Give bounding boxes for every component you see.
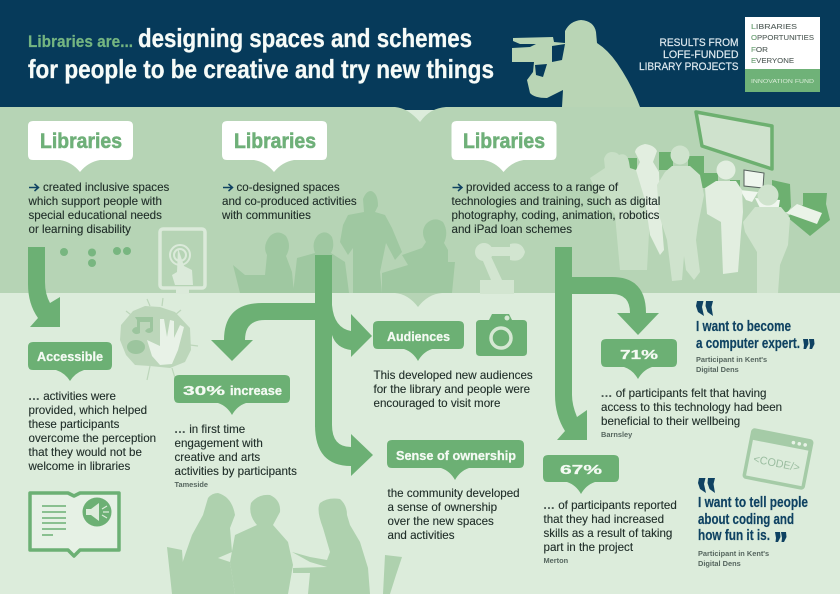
- text: results from: LOFE-FUNDED: [663, 49, 739, 61]
- label: Accessible: Accessible: [37, 349, 103, 364]
- background: header navy: [0, 0, 840, 110]
- text: 67% of participants: that they had increased: [544, 513, 664, 526]
- text: co-designed spaces: with communities: [221, 209, 311, 222]
- text: 71% of participants: beneficial to their wellbeing: [601, 415, 740, 428]
- label: 30% increase: increase: [230, 383, 282, 398]
- text: developed new audiences: encouraged to visit more: [374, 397, 500, 410]
- text: 71% of participants: ... of participants felt that having: [601, 387, 766, 400]
- text: community developed: the community developed: [388, 487, 520, 500]
- logo: Libraries Opportunities for Everyone: INNOVATION FUND: [751, 79, 814, 85]
- panel: Libraries heading 2: Libraries: [234, 130, 316, 153]
- panel: Libraries heading 1: [28, 121, 133, 172]
- text: first time engagement: creative and arts: [174, 451, 260, 464]
- label: 71%: 71%: [620, 347, 659, 362]
- label: Audiences: Audiences: [387, 329, 450, 344]
- label: Audiences: [373, 321, 464, 361]
- icon: three people talking: [167, 493, 402, 594]
- logo: Libraries Opportunities for Everyone: [745, 17, 820, 92]
- text: provided access: [452, 181, 660, 236]
- text: created inclusive spaces: or learning disability: [28, 223, 131, 236]
- text: results from: RESULTS FROM: [660, 37, 738, 49]
- logo: Libraries Opportunities for Everyone: LIBRARIES: [751, 22, 797, 31]
- text: created inclusive spaces: created inclusive spaces: [43, 181, 170, 194]
- logo: Libraries Opportunities for Everyone: FOR: [751, 45, 769, 54]
- text: activities were provided: provided, which helped: [28, 404, 147, 417]
- text: created inclusive spaces: special educational needs: [28, 209, 162, 222]
- panel: Libraries heading 1: Libraries: [40, 130, 122, 153]
- label: 67%: 67%: [560, 462, 603, 477]
- text: co-designed spaces: [221, 181, 357, 222]
- quote: computer expert: Digital Dens: [696, 365, 739, 374]
- quote: computer expert: I want to become: [696, 318, 791, 335]
- icon: camera: [476, 314, 527, 356]
- text: community developed: over the new spaces: [388, 515, 494, 528]
- text: activities were provided: ... activities were: [28, 390, 116, 403]
- panel: Libraries heading 3: Libraries: [463, 130, 545, 153]
- arrow: to Accessible: [28, 247, 60, 327]
- icon: code window: [744, 430, 812, 488]
- logo: Libraries Opportunities for Everyone: OPPORTUNITIES: [751, 33, 814, 42]
- text: first time engagement: ... in first time: [174, 423, 245, 436]
- quote: computer expert: a computer expert.: [696, 335, 800, 352]
- text: provided access: and iPad loan schemes: [452, 223, 572, 236]
- logo: Libraries Opportunities for Everyone: EVERYONE: [751, 56, 794, 65]
- text: community developed: [388, 487, 520, 542]
- icon: painted hand splat: [120, 298, 198, 380]
- text: activities were provided: welcome in libraries: [28, 460, 131, 473]
- text: 67% of participants: Merton: [544, 556, 569, 565]
- icon: code window: <CODE/>: [752, 453, 801, 474]
- text: developed new audiences: This developed new audiences: [374, 369, 533, 382]
- label: Sense of ownership: Sense of ownership: [396, 448, 516, 463]
- text: provided access: technologies and training, such as digital: [452, 195, 660, 208]
- text: co-designed spaces: co-designed spaces: [236, 181, 340, 194]
- quote: coding: Participant in Kent's: [698, 549, 769, 558]
- label: 71%: [601, 339, 677, 379]
- text: 71% of participants: [601, 387, 782, 439]
- icon: braille dots: [60, 247, 131, 267]
- text: developed new audiences: for the library and people were: [374, 383, 530, 396]
- text: first time engagement: activities by participants: [174, 465, 297, 478]
- icon: standing and seated group silhouette: [233, 191, 455, 293]
- text: results from: LIBRARY PROJECTS: [639, 61, 738, 73]
- text: developed new audiences: [374, 369, 533, 410]
- icon: group of people with technology: [590, 144, 790, 293]
- label: Sense of ownership: [387, 440, 524, 480]
- text: 67% of participants: skills as a result of taking: [544, 527, 672, 540]
- text: activities were provided: that they would not be: [28, 446, 142, 459]
- text: 71% of participants: Barnsley: [601, 430, 633, 439]
- label: 67%: [543, 455, 619, 494]
- text: 67% of participants: part in the project: [544, 541, 634, 554]
- title: Libraries are...: [28, 32, 133, 51]
- quote: computer expert: [696, 301, 814, 374]
- text: first time engagement: [174, 423, 297, 489]
- label: 30% increase: 30%: [183, 383, 226, 398]
- icon: robot arm: [475, 243, 525, 294]
- text: created inclusive spaces: which support people with: [28, 195, 162, 208]
- text: created inclusive spaces: [28, 181, 170, 236]
- text: co-designed spaces: and co-produced activities: [222, 195, 357, 208]
- text: first time engagement: Tameside: [174, 480, 208, 489]
- panel: Libraries heading 3: [452, 121, 556, 172]
- panel: Libraries heading 2: [222, 121, 327, 172]
- text: activities were provided: these participants: [28, 418, 120, 431]
- text: 71% of participants: access to this technology had been: [601, 401, 782, 414]
- label: 30% increase: [174, 375, 290, 415]
- quote: computer expert: Participant in Kent's: [696, 355, 767, 364]
- quote: coding: [698, 478, 808, 568]
- text: 67% of participants: [544, 499, 677, 565]
- quote: coding: about coding and: [698, 511, 794, 528]
- text: results from: [639, 37, 739, 73]
- icon: tablet touch: [160, 229, 205, 294]
- arrow: central branching arrow: [211, 255, 373, 476]
- panel: lower light area: [0, 293, 840, 594]
- label: Accessible: [28, 342, 112, 381]
- text: community developed: and activities: [388, 529, 455, 542]
- title: designing spaces and schemes: [138, 23, 472, 53]
- text: activities were provided: [28, 390, 156, 473]
- quote: coding: Digital Dens: [698, 559, 741, 568]
- arrow: right branching arrow: [555, 247, 659, 440]
- quote: coding: I want to tell people: [698, 494, 808, 511]
- icon: cameraman silhouette: [512, 20, 640, 107]
- icon: book with speaker: [30, 493, 119, 556]
- text: activities were provided: overcome the perception: [28, 432, 156, 445]
- icon: screen and green devices: [626, 112, 830, 236]
- text: provided access: photography, coding, animation, robotics: [452, 209, 660, 222]
- text: community developed: a sense of ownership: [388, 501, 497, 514]
- title: [28, 23, 494, 84]
- title: for people to be creative and try new things: [28, 54, 494, 84]
- text: first time engagement: engagement with: [174, 437, 263, 450]
- quote: coding: how fun it is.: [698, 527, 770, 544]
- text: 67% of participants: ... of participants reported: [544, 499, 677, 512]
- panel: middle green band: [0, 107, 840, 310]
- text: provided access: provided access to a range of: [466, 181, 619, 194]
